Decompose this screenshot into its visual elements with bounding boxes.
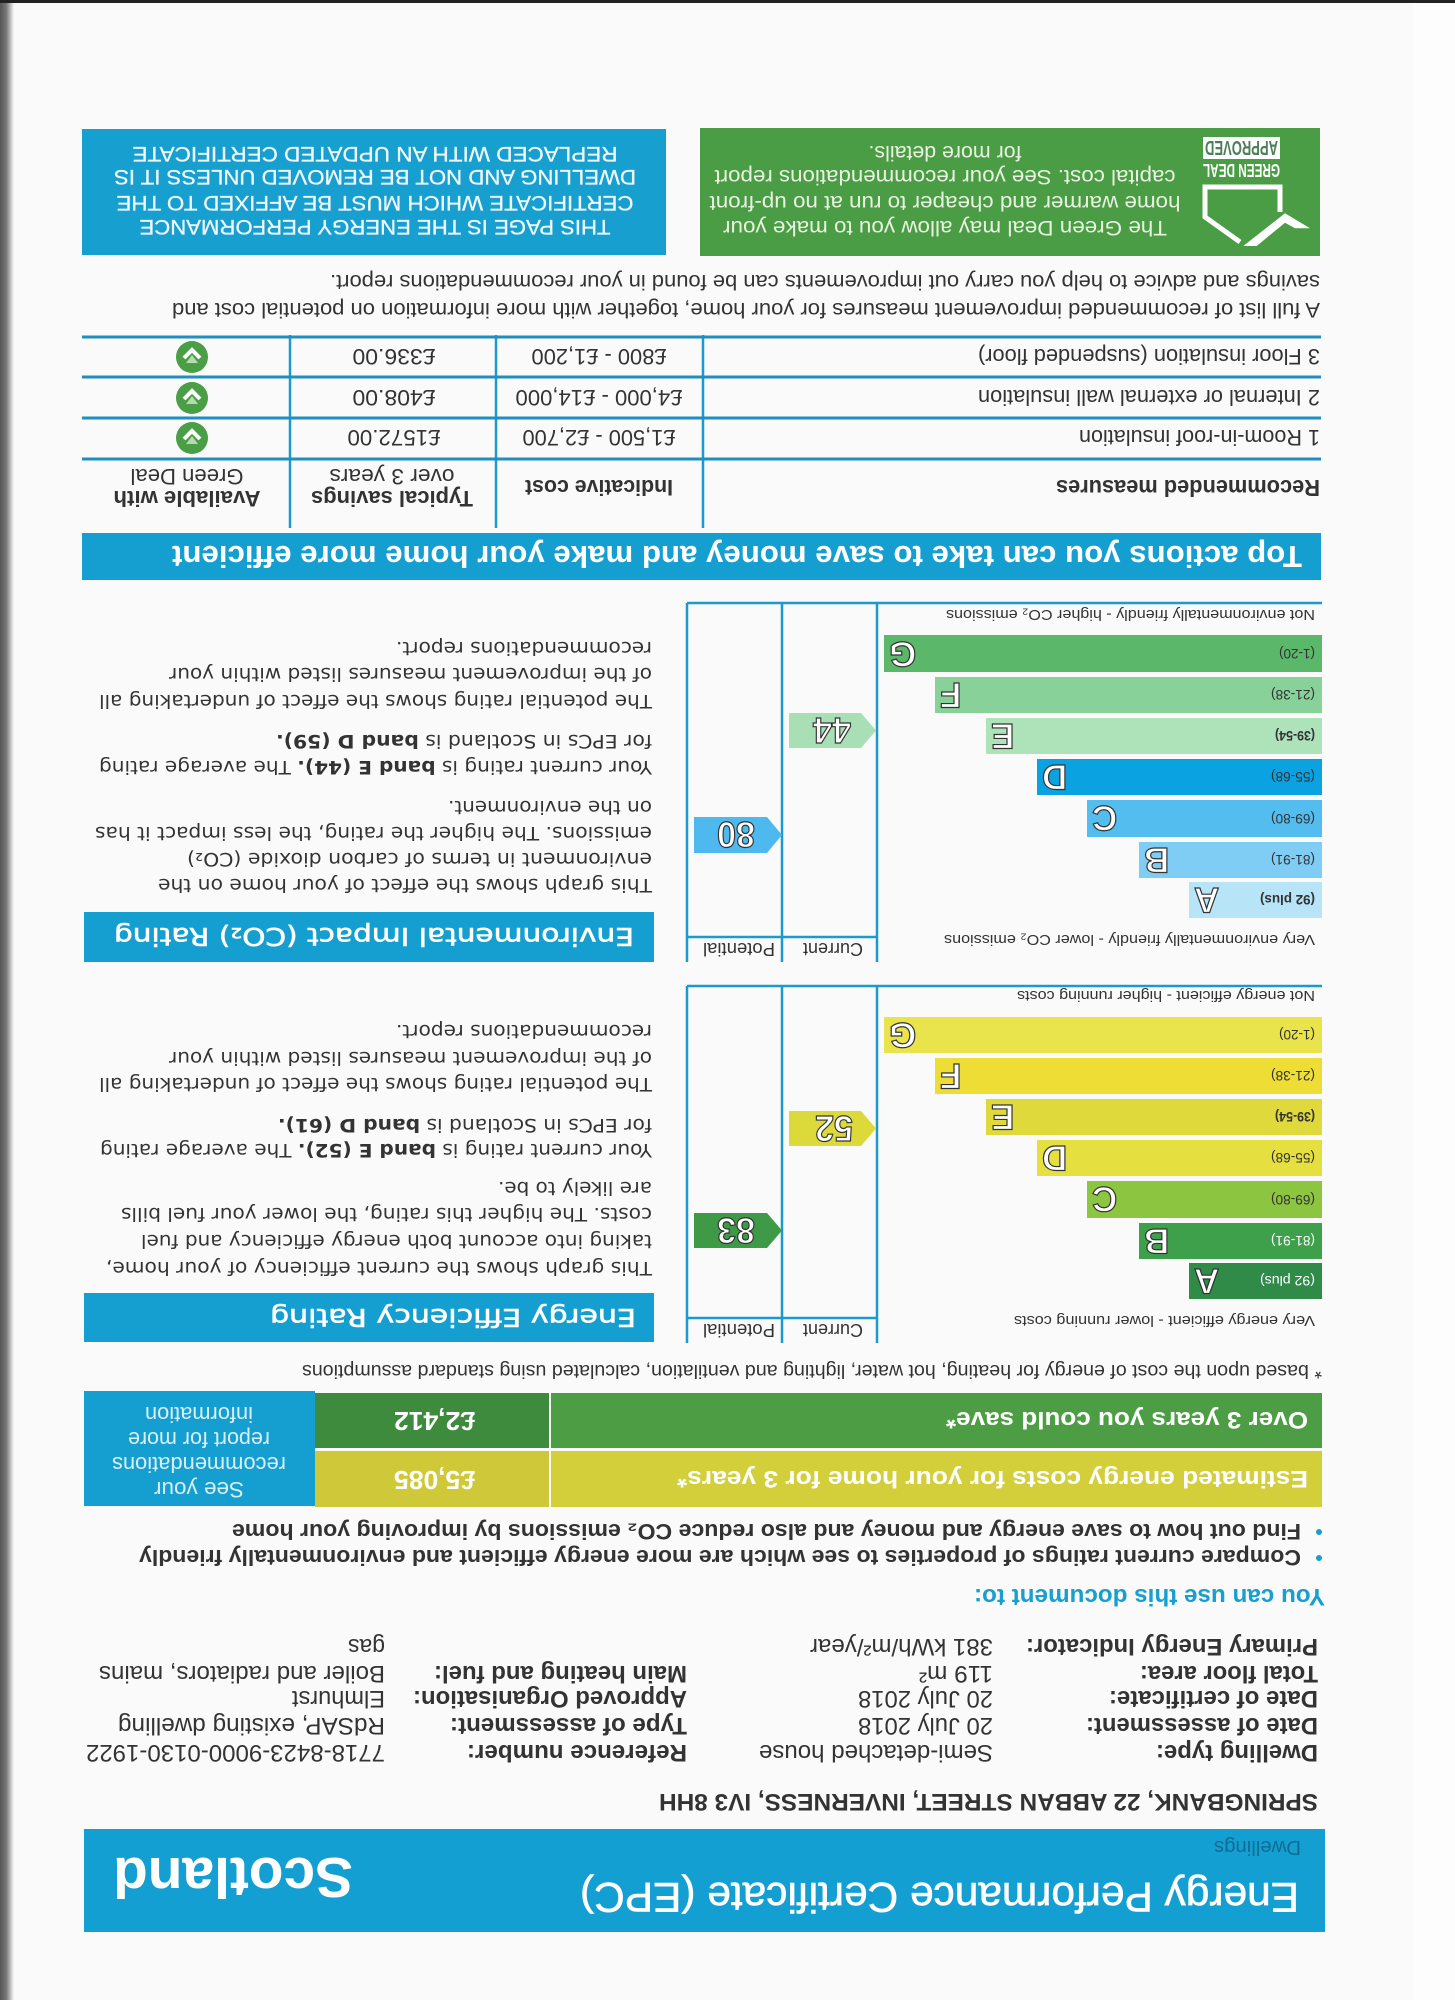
current rating paragraph: Your current rating is band E (52). The average rating: [100, 1139, 653, 1161]
arrow: potential rating 83: 83: [717, 1210, 755, 1251]
arrow: potential rating 80: 80: [717, 814, 755, 855]
row 1: room-in-roof insulation: £1,500 - £2,700: [522, 425, 676, 450]
panel: cost table: [84, 1391, 1322, 1507]
property detail values: 20 July 2018: [858, 1712, 993, 1739]
savings row label: Over 3 years you could save*: [945, 1406, 1308, 1433]
assessment labels: Approved Organisation:: [413, 1685, 687, 1712]
green deal text: home warmer and cheaper to run at no up-front: [709, 191, 1180, 214]
chart bottom label: Not energy efficient - higher running costs: [1017, 987, 1315, 1004]
panel: energy efficiency text: [84, 1020, 654, 1342]
description paragraph: [95, 796, 653, 896]
band C: (69-80): [1271, 811, 1315, 827]
row 1: room-in-roof insulation: £1572.00: [348, 425, 440, 450]
chart bottom label: Not environmentally friendly - higher CO₂ emissions: [946, 606, 1315, 623]
band E: E: [991, 1097, 1014, 1136]
text block: full list note: [172, 270, 1320, 321]
assessment values: Boiler and radiators, mains: [99, 1660, 385, 1687]
band A: A: [1194, 1261, 1219, 1300]
assessment labels: Type of assessment:: [450, 1712, 687, 1739]
band A: (92 plus): [1260, 892, 1315, 908]
property detail values: 381 kWh/m²/year: [810, 1633, 993, 1660]
band A: (92 plus): [1260, 1273, 1315, 1289]
title: Energy Performance Certificate (EPC): [580, 1874, 1299, 1921]
property detail values: [759, 1633, 993, 1766]
property detail labels: [1026, 1633, 1318, 1766]
potential rating paragraph: recommendations report.: [396, 637, 652, 659]
callout: see recommendations report: information: [145, 1402, 253, 1427]
column heading: current: Current: [803, 939, 863, 959]
description paragraph: [106, 1177, 653, 1279]
property detail labels: Date of assessment:: [1086, 1712, 1318, 1739]
row 2: wall insulation: [176, 382, 1320, 414]
heading: you can use this document: You can use this document to:: [974, 1583, 1325, 1610]
panel: CO2 impact text: [84, 637, 654, 962]
band C: [1087, 798, 1322, 837]
column heading: potential: Potential: [703, 939, 775, 959]
bullet list: Find out how to save energy and money and also reduce CO₂ emissions by improving your home: [232, 1519, 1301, 1544]
assessment values: Elmhurst: [292, 1685, 385, 1712]
band G: G: [889, 1015, 916, 1054]
text block: full list note: A full list of recommended improvement measures for your home, together with more information on potential cost and: [172, 298, 1320, 321]
panel: property details: [86, 1633, 1318, 1766]
band E: [986, 716, 1322, 755]
band D: (55-68): [1271, 769, 1315, 785]
assessment labels: Reference number:: [467, 1739, 687, 1766]
band A: [1189, 880, 1322, 919]
heading: top actions: [82, 533, 1321, 580]
table header: Recommended measures: [1056, 475, 1320, 501]
table header: over 3 years: [330, 464, 454, 489]
band D: [1037, 757, 1322, 796]
potential rating paragraph: of the improvement measures listed within your: [169, 663, 652, 685]
panel: header banner: [84, 1829, 1325, 1932]
chart top label: Very environmentally friendly - lower CO₂ emissions: [944, 931, 1315, 948]
notice text: REPLACED WITH AN UPDATED CERTIFICATE: [132, 142, 618, 165]
description paragraph: emissions. The higher the rating, the less impact it has: [95, 822, 652, 844]
band C: C: [1092, 1179, 1117, 1218]
arrow: current rating 52: 52: [815, 1108, 853, 1149]
band G: (1-20): [1279, 646, 1315, 662]
band E: E: [991, 716, 1014, 755]
panel: energy efficiency chart: [687, 986, 1322, 1343]
arrow: current rating 44: [789, 710, 876, 751]
heading: Scotland: Scotland: [113, 1845, 353, 1909]
band F: F: [940, 675, 961, 714]
band E: [986, 1097, 1322, 1136]
table header: Typical savings: [311, 486, 473, 511]
callout: see recommendations report: See your: [154, 1477, 244, 1502]
assessment labels: [413, 1660, 687, 1766]
current rating paragraph: for EPCs in Scotland is band D (61).: [278, 1114, 652, 1136]
current rating paragraph: [100, 1114, 653, 1161]
green deal text: for more details.: [868, 141, 1022, 164]
property detail labels: Primary Energy Indicator:: [1026, 1633, 1318, 1660]
band D: (55-68): [1271, 1150, 1315, 1166]
potential rating paragraph: recommendations report.: [396, 1020, 652, 1042]
band F: (21-38): [1271, 1068, 1315, 1084]
heading: environmental impact rating: [84, 912, 654, 962]
panel: certificate notice: [82, 129, 666, 255]
property detail values: 20 July 2018: [858, 1685, 993, 1712]
green deal text: The Green Deal may allow you to make your: [723, 216, 1167, 239]
band E: (39-54): [1275, 728, 1315, 744]
potential rating paragraph: The potential rating shows the effect of undertaking all: [99, 690, 653, 712]
band F: [935, 675, 1322, 714]
band F: [935, 1056, 1322, 1095]
heading: environmental impact rating: Environmental Impact (CO₂) Rating: [114, 922, 634, 951]
band D: D: [1042, 1138, 1067, 1177]
footnote: * based upon the cost of energy for heating, hot water, lighting and ventilation, calculated using standard assumptions: [302, 1360, 1322, 1381]
assessment values: [86, 1633, 385, 1766]
panel: recommended measures table: [82, 335, 1321, 528]
callout: see recommendations report: [84, 1391, 315, 1506]
row 3: floor insulation: £800 - £1,200: [532, 344, 666, 369]
assessment values: gas: [348, 1633, 385, 1660]
upside-down scanned certificate page: [82, 128, 1325, 1932]
notice text: THIS PAGE IS THE ENERGY PERFORMANCE: [140, 215, 610, 238]
bullet list: Compare current ratings of properties to see which are more energy efficient and environmentally friendly: [138, 1545, 1301, 1570]
estimated cost value: £5,085: [394, 1465, 475, 1495]
band G: G: [889, 634, 916, 673]
callout: see recommendations report: report for more: [128, 1427, 270, 1452]
band G: (1-20): [1279, 1027, 1315, 1043]
arrow: current rating 44: 44: [813, 710, 851, 751]
notice text: DWELLING AND NOT BE REMOVED UNLESS IT IS: [114, 165, 636, 188]
band C: (69-80): [1271, 1192, 1315, 1208]
assessment values: 7718-8423-9000-0130-1922: [86, 1739, 385, 1766]
arrow: potential rating 83: [694, 1210, 782, 1251]
icon: green deal approved logo: GREEN DEAL: [1203, 160, 1280, 180]
property detail values: 119 m²: [919, 1660, 993, 1687]
text block: full list note: savings and advice to help you carry out improvements can be found in your recommendations report.: [330, 270, 1320, 293]
description paragraph: are likely to be.: [498, 1177, 652, 1199]
potential rating paragraph: [99, 1020, 653, 1095]
table header: Indicative cost: [524, 475, 673, 500]
band B: [1139, 840, 1322, 879]
table header: Available with: [114, 486, 260, 511]
heading: energy efficiency rating: Energy Efficiency Rating: [270, 1303, 636, 1332]
band A: A: [1194, 880, 1219, 919]
panel: CO2 impact chart: [687, 603, 1322, 962]
band D: D: [1042, 757, 1067, 796]
potential rating paragraph: The potential rating shows the effect of undertaking all: [99, 1073, 653, 1095]
band B: (81-91): [1271, 852, 1315, 868]
description paragraph: taking into account both energy efficiency and fuel: [141, 1230, 652, 1252]
description paragraph: environment in terms of carbon dioxide (CO₂): [187, 848, 652, 870]
assessment labels: Main heating and fuel:: [434, 1660, 687, 1687]
potential rating paragraph: of the improvement measures listed within your: [169, 1047, 652, 1069]
row 3: floor insulation: £336.00: [352, 344, 436, 369]
estimated cost row label: Estimated energy costs for your home for 3 years*: [676, 1465, 1308, 1492]
notice text: [114, 142, 636, 238]
band F: (21-38): [1271, 687, 1315, 703]
band B: (81-91): [1271, 1233, 1315, 1249]
row 2: wall insulation: 2 Internal or external wall insulation: [978, 385, 1320, 410]
band C: [1087, 1179, 1322, 1218]
band C: C: [1092, 798, 1117, 837]
arrow: potential rating 80: [694, 814, 782, 855]
icon: green deal approved logo: [1203, 136, 1310, 246]
description paragraph: costs. The higher this rating, the lower your fuel bills: [121, 1203, 652, 1225]
description paragraph: This graph shows the current efficiency of your home,: [106, 1257, 653, 1279]
band A: [1189, 1261, 1322, 1300]
band B: B: [1144, 1221, 1169, 1260]
band G: [884, 1015, 1322, 1054]
subheading: Dwellings: Dwellings: [1214, 1836, 1301, 1858]
table header: [114, 464, 1320, 511]
arrow: current rating 52: [789, 1108, 876, 1149]
band E: (39-54): [1275, 1109, 1315, 1125]
chart top label: Very energy efficient - lower running costs: [1014, 1312, 1315, 1329]
property detail labels: Dwelling type:: [1156, 1739, 1318, 1766]
column heading: potential: Potential: [703, 1320, 775, 1340]
band D: [1037, 1138, 1322, 1177]
row 2: wall insulation: £4,000 - £14,000: [516, 385, 682, 410]
description paragraph: on the environment.: [448, 796, 652, 818]
row 1: room-in-roof insulation: [176, 422, 1320, 454]
notice text: CERTIFICATE WHICH MUST BE AFFIXED TO THE: [116, 191, 634, 214]
table header: Green Deal: [130, 464, 244, 489]
band G: [884, 634, 1322, 673]
row 1: room-in-roof insulation: 1 Room-in-roof insulation: [1079, 425, 1320, 450]
row 3: floor insulation: 3 Floor insulation (suspended floor): [978, 344, 1320, 369]
green deal text: capital cost. See your recommendations report: [714, 165, 1176, 188]
column heading: current: Current: [803, 1320, 863, 1340]
panel: green deal callout: [700, 128, 1320, 256]
heading: energy efficiency rating: [84, 1293, 654, 1342]
current rating paragraph: Your current rating is band E (44). The average rating: [99, 756, 653, 778]
band F: F: [940, 1056, 961, 1095]
icon: green deal approved logo: APPROVED: [1205, 136, 1278, 158]
current rating paragraph: for EPCs in Scotland is band D (59).: [276, 730, 652, 752]
heading: top actions: Top actions you can take to save money and make your home more efficient: [172, 539, 1302, 574]
bullet list: [138, 1519, 1322, 1570]
assessment values: RdSAP, existing dwelling: [118, 1712, 385, 1739]
band B: [1139, 1221, 1322, 1260]
row 2: wall insulation: £408.00: [352, 385, 436, 410]
property detail labels: Total floor area:: [1140, 1660, 1318, 1687]
property detail values: Semi-detached house: [759, 1739, 993, 1766]
description paragraph: This graph shows the effect of your home on the: [158, 874, 653, 896]
address: SPRINGBANK, 22 ABBAN STREET, INVERNESS, IV3 8HH: [659, 1788, 1318, 1815]
callout: see recommendations report: recommendations: [112, 1452, 286, 1477]
savings value: £2,412: [394, 1406, 475, 1436]
property detail labels: Date of certificate:: [1109, 1685, 1318, 1712]
current rating paragraph: [99, 730, 653, 778]
green deal text: [709, 141, 1180, 239]
band B: B: [1144, 840, 1169, 879]
row 3: floor insulation: [176, 341, 1320, 373]
potential rating paragraph: [99, 637, 653, 712]
